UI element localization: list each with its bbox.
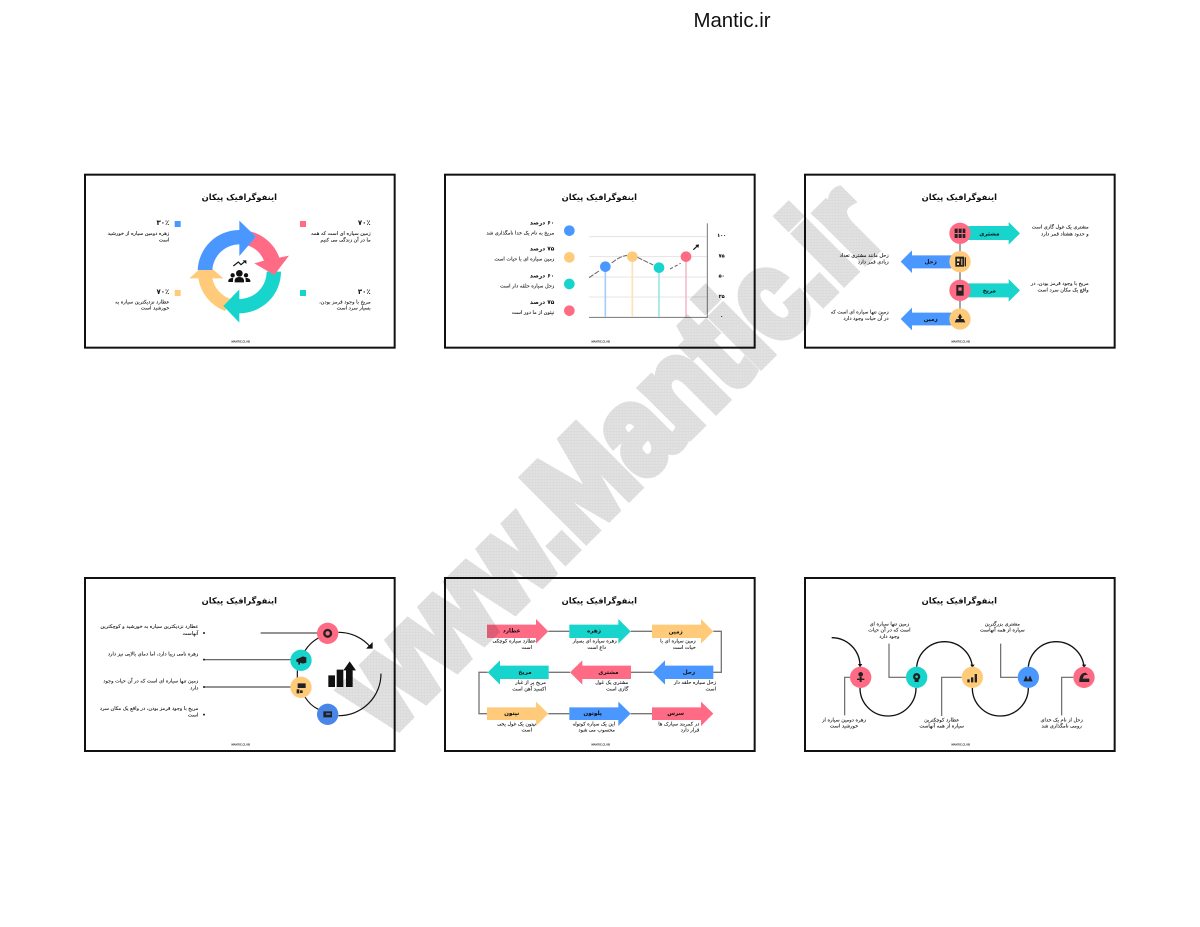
legend list: زحل سیاره حلقه دار است bbox=[500, 283, 555, 289]
captions: زمین سیاره ای با bbox=[660, 639, 696, 645]
title: اینفوگرافیک پیکان bbox=[202, 595, 277, 606]
ring of four arrows bbox=[189, 221, 289, 323]
legend: top left: زهره دومین سیاره از خورشید bbox=[108, 231, 170, 237]
legend: bottom left bbox=[115, 288, 181, 312]
icon circles bbox=[949, 223, 971, 330]
legend: top left: است bbox=[159, 237, 169, 243]
title: اینفوگرافیک پیکان bbox=[922, 595, 997, 606]
legend: bottom right: ۳۰٪ bbox=[358, 288, 371, 296]
legend list: مریخ به نام یک خدا نامگذاری شد bbox=[486, 229, 555, 236]
row 1 arrows: زهره bbox=[587, 629, 601, 635]
legend: bottom left: عطارد نزدیکترین سیاره به bbox=[115, 299, 169, 305]
leader lines bbox=[845, 644, 1073, 716]
arrow: Mars bbox=[968, 279, 1020, 302]
legend list: ۷۵ درصد bbox=[530, 247, 555, 253]
row 1 arrows: زمین bbox=[669, 629, 683, 635]
list text: زهره نامی زیبا دارد، اما دمای بالایی نیز دارد bbox=[108, 652, 199, 658]
captions: خورشید است bbox=[830, 724, 858, 730]
row 3 arrows: سرس bbox=[667, 711, 685, 717]
arrow: Earth bbox=[901, 308, 952, 330]
legend list: ۷۵ درصد bbox=[530, 300, 555, 306]
icon: team with trend arrow bbox=[228, 260, 250, 282]
legend list: نپتون از ما دور است bbox=[512, 310, 554, 316]
icon: growth bars bbox=[328, 661, 356, 687]
captions: سیاره از همه آنهاست bbox=[919, 723, 964, 730]
icon nodes bbox=[290, 623, 338, 725]
captions: داغ است bbox=[587, 645, 606, 651]
text blocks bbox=[831, 224, 1089, 322]
panel: wave path bbox=[805, 578, 1115, 751]
captions: است bbox=[522, 645, 532, 651]
row 2 arrows bbox=[488, 660, 713, 685]
footer mark: MANTIC.CLUB bbox=[951, 339, 970, 343]
text blocks: مریخ با وجود قرمز بودن، در bbox=[1030, 281, 1089, 287]
captions bbox=[492, 639, 717, 733]
text blocks: زیادی قمر دارد bbox=[858, 259, 889, 265]
legend: bottom left: خورشید است bbox=[141, 306, 169, 312]
legend: top right: ۷۰٪ bbox=[358, 219, 371, 227]
captions: گازی است bbox=[606, 685, 629, 692]
legend: bottom left: ۷۰٪ bbox=[157, 288, 169, 296]
captions: مشتری بزرگترین bbox=[985, 620, 1020, 627]
captions: زمین تنها سیاره ای bbox=[870, 621, 910, 627]
list text: زمین تنها سیاره ای است که در آن حیات وجود bbox=[103, 678, 199, 685]
list text: آنهاست bbox=[183, 630, 199, 637]
axis labels: ۵۰ bbox=[719, 274, 725, 280]
title: اینفوگرافیک پیکان bbox=[202, 192, 277, 203]
captions: است bbox=[522, 727, 532, 733]
footer mark: MANTIC.CLUB bbox=[231, 339, 250, 343]
captions: نپتون یک غول یخی bbox=[497, 721, 536, 727]
arrow: Jupiter: مشتری bbox=[979, 231, 1000, 237]
captions: عطارد کوچکترین bbox=[924, 717, 959, 723]
captions: اکسید آهن است bbox=[512, 685, 546, 692]
connectors bbox=[479, 631, 721, 714]
footer mark: MANTIC.CLUB bbox=[591, 743, 610, 747]
arrow: Saturn: زحل bbox=[924, 260, 937, 266]
legend: top right: ما در آن زندگی می کنیم bbox=[320, 236, 371, 243]
legend: top right: زمین سیاره ای است که همه bbox=[311, 231, 371, 237]
text blocks: مشتری یک غول گازی است bbox=[1032, 224, 1089, 231]
footer mark: MANTIC.CLUB bbox=[231, 743, 250, 747]
title: اینفوگرافیک پیکان bbox=[922, 192, 997, 203]
text blocks: واقع یک مکان سرد است bbox=[1037, 288, 1089, 294]
arrow: Mars: مریخ bbox=[983, 288, 996, 294]
vertical connector bbox=[958, 233, 962, 319]
row 3 arrows: نپتون bbox=[504, 711, 519, 717]
text blocks: زمین تنها سیاره ای است که bbox=[831, 310, 889, 316]
captions: عطارد سیاره کوچکی bbox=[492, 639, 536, 645]
legend list: ۶۰ درصد bbox=[530, 273, 554, 279]
axis labels bbox=[717, 233, 726, 320]
legend: bottom right bbox=[300, 288, 371, 312]
title: اینفوگرافیک پیکان bbox=[562, 192, 637, 203]
watermark: www.Mantic.ir bbox=[307, 156, 907, 757]
footer mark: MANTIC.CLUB bbox=[591, 339, 610, 343]
panel: circular list with bars bbox=[85, 578, 395, 751]
panel: circular arrows bbox=[85, 175, 395, 348]
captions: وجود دارد bbox=[879, 634, 900, 640]
panel: line chart bbox=[445, 175, 755, 348]
legend: top right bbox=[300, 219, 371, 243]
row 2 arrows: مشتری bbox=[598, 670, 619, 676]
list text: مریخ با وجود قرمز بودن، در واقع یک مکان سرد bbox=[100, 706, 199, 712]
legend: top left bbox=[108, 219, 181, 243]
row 3 arrows: پلوتون bbox=[583, 711, 602, 717]
list text: عطارد نزدیکترین سیاره به خورشید و کوچکترین bbox=[100, 624, 198, 630]
arrow: Earth: زمین bbox=[924, 317, 938, 323]
captions: محسوب می شود bbox=[578, 727, 615, 733]
arrow: Jupiter bbox=[968, 222, 1020, 245]
captions: سیاره از همه آنهاست bbox=[980, 627, 1025, 634]
cycle arc bbox=[297, 632, 381, 716]
captions: حیات است bbox=[673, 645, 696, 651]
captions: قرار دارد bbox=[681, 727, 700, 733]
icon nodes bbox=[850, 667, 1095, 688]
row 2 arrows: مریخ bbox=[518, 670, 532, 676]
captions: زحل سیاره حلقه دار bbox=[673, 680, 717, 686]
panel: serpentine arrows bbox=[445, 578, 755, 751]
captions bbox=[821, 620, 1083, 730]
captions: زحل از نام یک خدای bbox=[1041, 717, 1083, 723]
row 2 arrows: زحل bbox=[683, 670, 695, 676]
leader lines bbox=[203, 632, 317, 716]
captions: است که در آن حیات bbox=[868, 627, 910, 634]
wave curve bbox=[832, 638, 1086, 716]
footer mark: MANTIC.CLUB bbox=[951, 743, 970, 747]
header: Mantic.ir: Mantic.ir bbox=[693, 10, 771, 32]
captions: مشتری یک غول bbox=[595, 680, 629, 686]
row 1 arrows: عطارد bbox=[503, 629, 521, 635]
captions: در کمربند سیارک ها bbox=[658, 720, 699, 727]
axis labels: ۲۵ bbox=[719, 294, 725, 300]
title: اینفوگرافیک پیکان bbox=[562, 595, 637, 606]
axis labels: ۱۰۰ bbox=[717, 233, 726, 239]
legend: bottom right: مریخ با وجود قرمز بودن، bbox=[319, 299, 371, 305]
legend: top left: ۳۰٪ bbox=[157, 219, 169, 227]
axis labels: ۷۵ bbox=[719, 253, 725, 259]
text blocks: زحل مانند مشتری تعداد bbox=[840, 253, 889, 259]
captions: مریخ پر از غبار bbox=[514, 680, 546, 686]
captions: این یک سیاره کوتوله bbox=[572, 721, 615, 727]
legend list: ۶۰ درصد bbox=[530, 221, 554, 227]
captions: رومی نامگذاری شد bbox=[1042, 723, 1082, 730]
row 3 arrows bbox=[487, 702, 713, 726]
text blocks: و حدود هشتاد قمر دارد bbox=[1041, 231, 1089, 237]
captions: زهره دومین سیاره از bbox=[821, 717, 866, 723]
captions: است bbox=[706, 686, 716, 692]
chart bbox=[589, 223, 707, 317]
axis labels: ۰ bbox=[720, 314, 723, 320]
panel: alternating arrows timeline bbox=[805, 175, 1115, 348]
legend list bbox=[486, 221, 575, 316]
arrow: Saturn bbox=[901, 250, 952, 273]
legend list: زمین سیاره ای با حیات است bbox=[494, 257, 555, 263]
text blocks: در آن حیات وجود دارد bbox=[843, 315, 889, 322]
row 1 arrows bbox=[487, 619, 713, 644]
captions: زهره سیاره ای بسیار bbox=[572, 639, 617, 645]
list text bbox=[100, 624, 199, 719]
legend: bottom right: بسیار سرد است bbox=[337, 306, 371, 312]
list text: دارد bbox=[190, 686, 198, 692]
list text: است bbox=[188, 713, 198, 719]
